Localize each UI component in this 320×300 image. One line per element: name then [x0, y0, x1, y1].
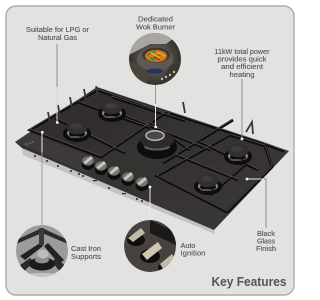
inset photo: wok burner	[129, 33, 181, 85]
leader: auto ignition	[149, 186, 151, 221]
callout: total power	[214, 47, 270, 79]
control knobs	[82, 156, 148, 191]
glass sheen	[15, 132, 100, 172]
glass top	[15, 87, 289, 230]
callout: cast iron supports: Supports	[71, 252, 101, 261]
callout: wok burner: Wok Burner	[136, 22, 175, 32]
title: Key Features	[212, 274, 286, 289]
inset photo: auto ignition knobs	[124, 220, 176, 274]
burner: wok centre	[137, 131, 177, 159]
callout: auto ignition: Auto	[180, 241, 196, 250]
leader: wok	[154, 84, 157, 128]
burner: back left	[98, 101, 126, 122]
leader: LPG	[56, 44, 59, 124]
callout: LPG or natural gas	[26, 25, 89, 42]
cast iron pan supports	[30, 89, 284, 212]
callout: wok burner: Dedicated	[138, 14, 173, 24]
callout: total power: heating	[230, 70, 254, 79]
callout: auto ignition	[180, 241, 206, 258]
callout: black glass finish: Black	[257, 229, 275, 238]
inset photo: cast iron supports	[16, 225, 68, 279]
hob appliance	[15, 86, 289, 234]
leader: cast iron	[41, 131, 44, 226]
callout: black glass finish: Finish	[256, 244, 276, 253]
callout: total power: provides quick	[218, 54, 267, 64]
burner: front right	[194, 174, 222, 195]
callout: total power: 11kW total power	[214, 47, 270, 56]
steel base strip	[22, 147, 215, 234]
callout: LPG or natural gas: Natural Gas	[38, 33, 77, 42]
burner: back right	[224, 144, 252, 165]
callout: cast iron supports: Cast Iron	[71, 244, 101, 253]
brand label: Bosch	[25, 139, 35, 147]
leader: black glass	[246, 178, 266, 228]
callout: total power: and efficient	[221, 62, 264, 71]
callout: auto ignition: Ignition	[180, 248, 206, 258]
callout: cast iron supports	[71, 244, 101, 261]
leader: power	[241, 79, 243, 140]
callout: wok burner	[136, 14, 175, 32]
steel mount dots	[34, 155, 143, 202]
burner: front left	[63, 121, 91, 142]
callout: black glass finish	[256, 229, 276, 253]
callout: black glass finish: Glass	[257, 236, 275, 246]
callout: LPG or natural gas: Suitable for LPG or	[26, 25, 89, 34]
